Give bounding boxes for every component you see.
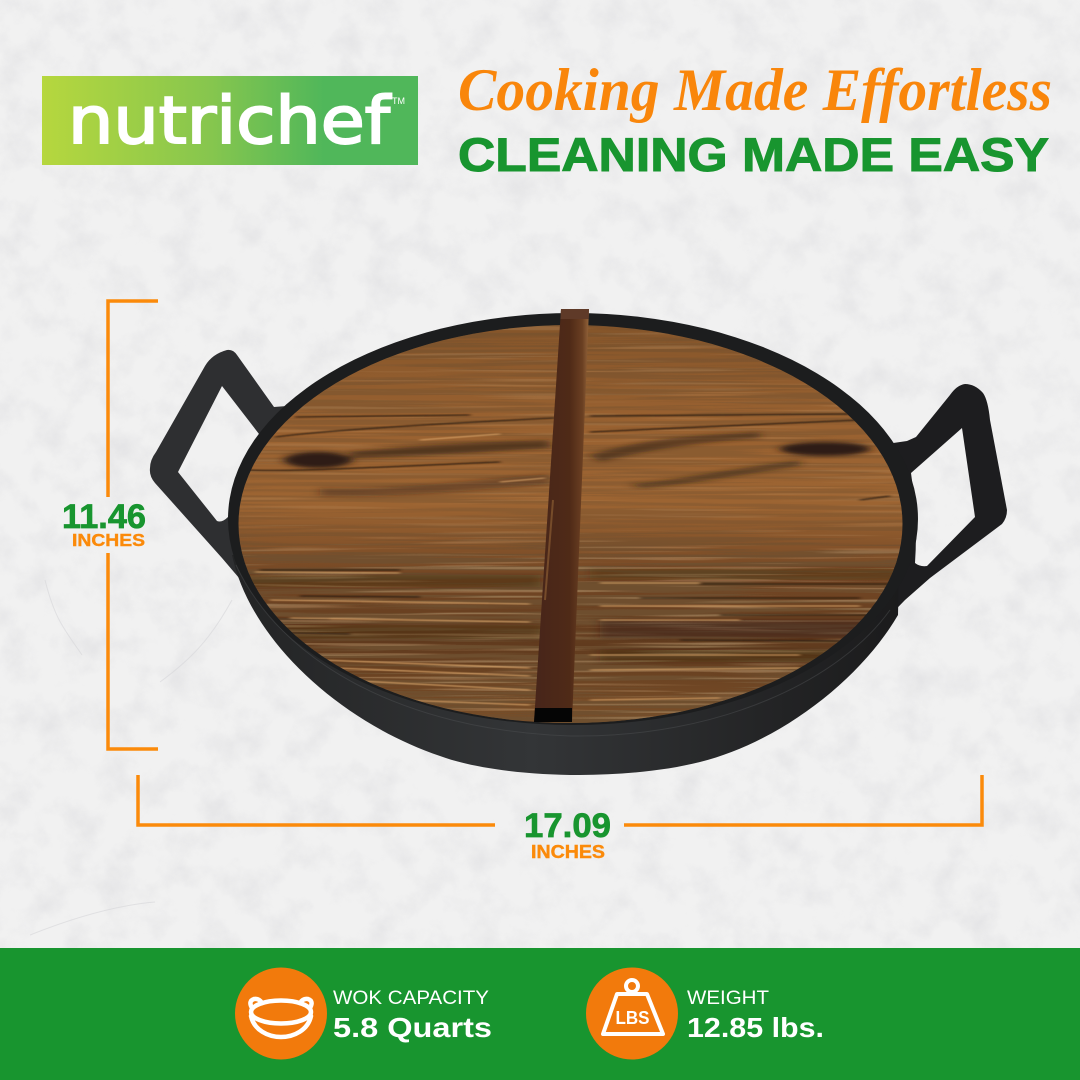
weight text: 12.85 lbs.	[687, 1012, 824, 1043]
wok product image	[150, 309, 1007, 775]
wok body	[232, 520, 900, 775]
rim highlight	[236, 565, 890, 736]
wok rim	[228, 313, 918, 725]
logo: nutrichef	[42, 76, 418, 165]
footer band	[0, 948, 1080, 1080]
icon: weight	[586, 968, 678, 1060]
weight text: WEIGHT	[687, 987, 769, 1009]
width dimension bracket	[138, 775, 982, 862]
icon: weight: LBS	[616, 1008, 650, 1028]
left handle	[150, 350, 300, 585]
right handle	[850, 384, 1007, 633]
icon: wok capacity	[235, 968, 327, 1060]
logo: nutrichef: nutrichef	[68, 84, 392, 159]
wok capacity text: 5.8 Quarts	[333, 1012, 492, 1043]
lid handle bar	[534, 309, 589, 722]
wok capacity text	[333, 987, 492, 1043]
lid light grain	[255, 434, 860, 705]
height dimension bracket: INCHES	[72, 530, 145, 550]
width dimension bracket: INCHES	[531, 842, 605, 862]
lid dark knots and swirls	[240, 432, 900, 662]
heading: CLEANING MADE EASY	[458, 128, 1049, 181]
wood lid	[238, 325, 904, 725]
height dimension bracket	[62, 301, 158, 749]
lid dark streaks	[245, 414, 890, 641]
logo: nutrichef: TM	[392, 96, 405, 106]
heading	[458, 57, 1052, 181]
weight text	[687, 987, 824, 1043]
heading: Cooking Made Effortless	[458, 57, 1052, 123]
wok capacity text: WOK CAPACITY	[333, 987, 489, 1009]
height dimension bracket: 11.46	[62, 498, 146, 536]
width dimension bracket: 17.09	[524, 807, 611, 845]
